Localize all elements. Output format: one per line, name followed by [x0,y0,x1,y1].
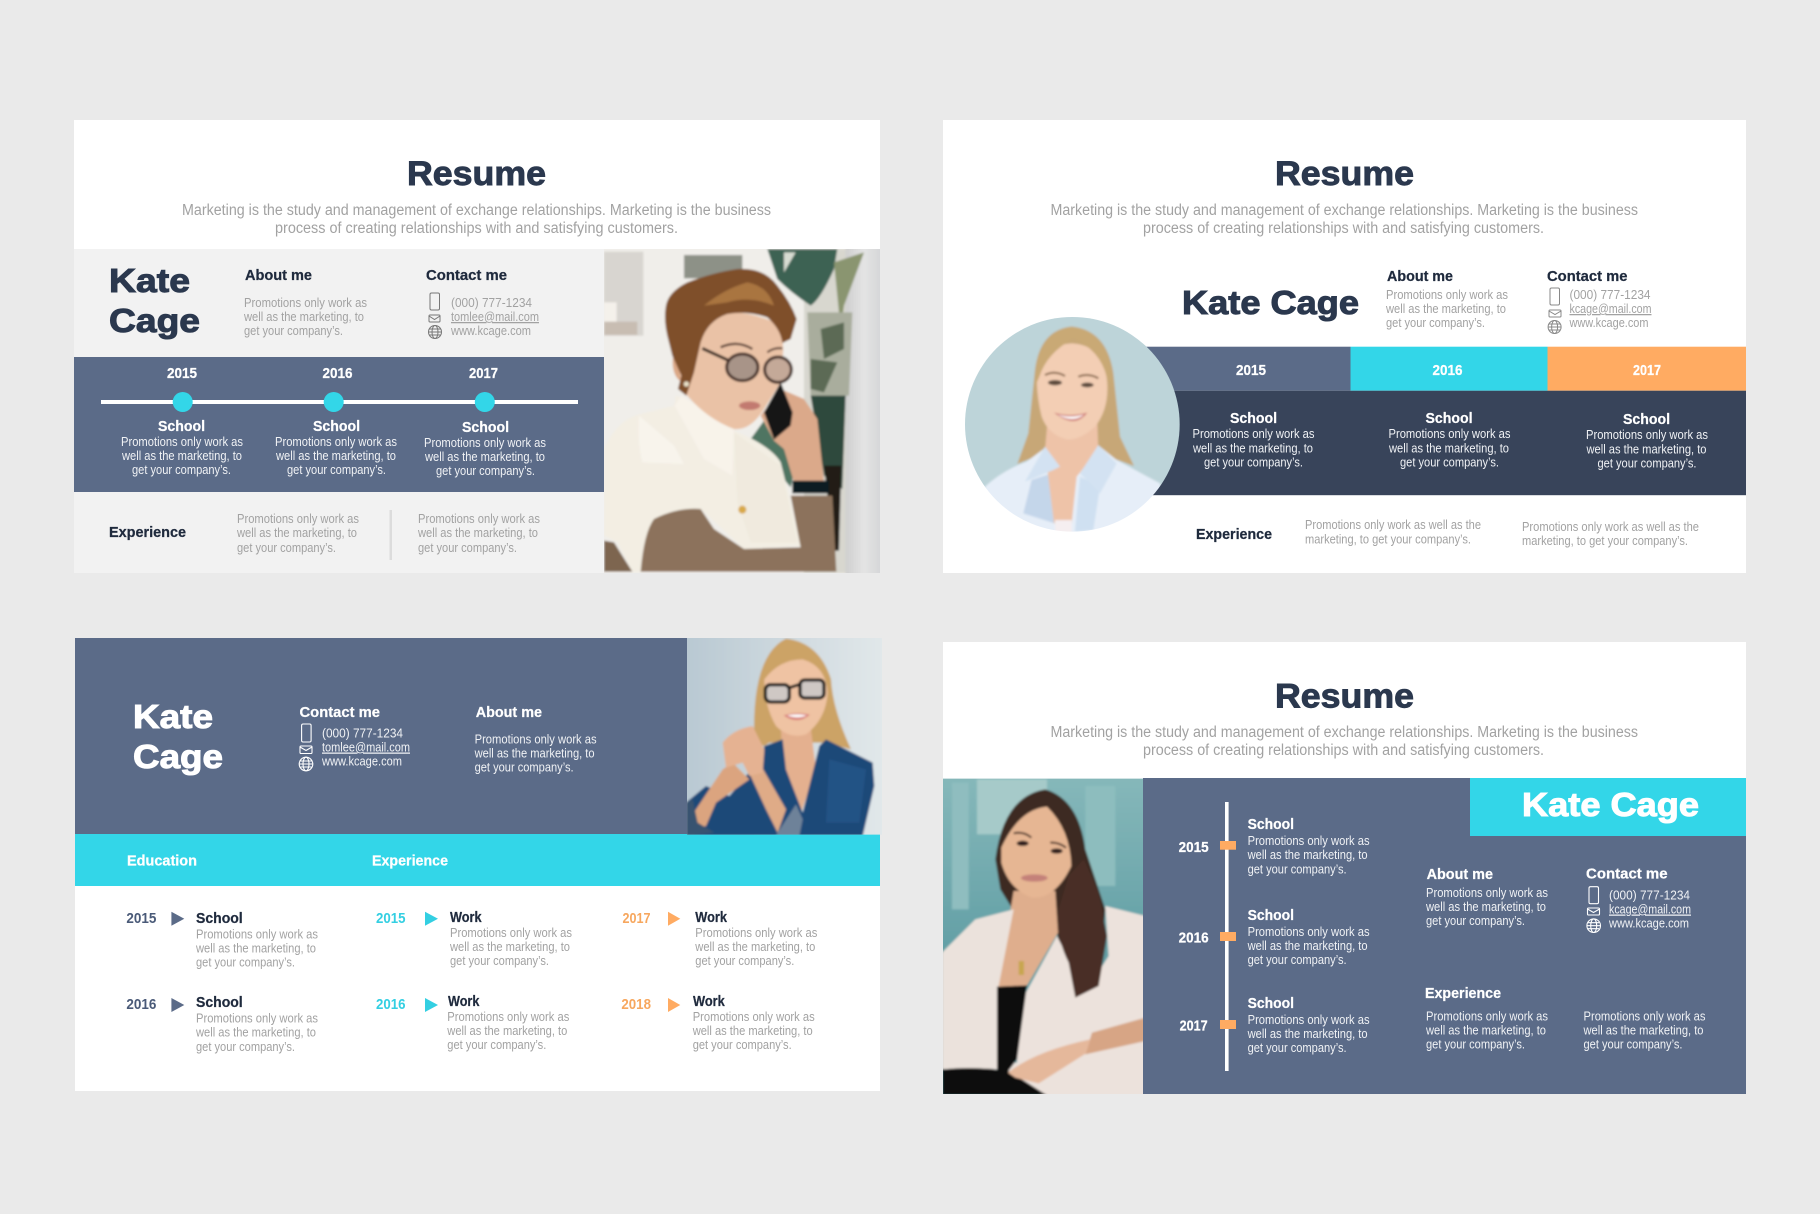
title: Resume [1275,678,1414,716]
subtitle [1050,724,1638,759]
subtitle: Marketing is the study and management of exchange relationships. Marketing is the business [1050,724,1638,741]
contact me [299,705,410,771]
photo: woman with glasses [683,633,886,839]
experience: well as the marketing, to [417,526,538,540]
timeline: education: well as the marketing, to [1247,848,1368,862]
year tabs: School [1230,411,1277,427]
experience: well as the marketing, to [236,526,357,540]
education list: well as the marketing, to [195,942,316,956]
contact me: Contact me [1547,269,1628,285]
year tabs: Promotions only work as [1586,428,1708,442]
timeline: education: 2016 [322,366,352,382]
timeline: education: well as the marketing, to [121,449,242,463]
contact me: www.kcage.com [321,754,402,768]
experience: Promotions only work as [1426,1010,1548,1024]
education list: Promotions only work as [196,928,318,942]
experience: get your company’s. [1584,1038,1682,1052]
education list: get your company’s. [196,1040,295,1054]
experience list: cyan: Promotions only work as [447,1010,569,1024]
experience: Promotions only work as [1584,1010,1706,1024]
contact me: (000) 777-1234 [1570,288,1650,302]
year tabs: Promotions only work as [1192,427,1314,441]
experience: well as the marketing, to [1583,1024,1704,1038]
about me: get your company’s. [1426,914,1525,928]
experience list: orange: 2017 [622,911,650,927]
contact me: (000) 777-1234 [322,726,403,740]
education list: well as the marketing, to [195,1026,316,1040]
about me [1385,269,1508,330]
experience: Promotions only work as well as the [1305,518,1481,532]
about me: About me [245,268,312,284]
subtitle [182,202,771,237]
name: Kate Cage [1182,284,1359,321]
contact me: kcage@mail.com [1609,902,1691,916]
section heading: experience: Experience [372,854,448,870]
contact me: Contact me [300,705,380,721]
timeline: education: School [313,419,360,435]
experience list: cyan: get your company’s. [447,1038,546,1052]
title: Resume [1275,155,1414,193]
about me: well as the marketing, to [1385,302,1506,316]
year tabs: get your company’s. [1598,456,1696,470]
about me: well as the marketing, to [1425,900,1546,914]
experience: marketing, to get your company’s. [1522,534,1688,548]
about me [243,268,367,338]
year tabs: School [1623,412,1670,428]
experience list: cyan: 2015 [376,911,406,927]
experience list: orange: well as the marketing, to [694,940,815,954]
photo: woman on phone [601,246,884,576]
experience list: orange: get your company’s. [695,954,794,968]
contact me: Contact me [426,268,507,284]
timeline: education: 2015 [1179,840,1209,856]
education list: Promotions only work as [196,1012,318,1026]
experience list: cyan: well as the marketing, to [449,940,570,954]
experience: get your company’s. [1426,1038,1525,1052]
title: Resume [407,155,546,193]
about me: Promotions only work as [475,732,597,746]
panel: resume slide 4 [939,642,1746,1099]
experience [1425,986,1706,1052]
timeline: education: Promotions only work as [275,435,397,449]
year tabs: well as the marketing, to [1192,442,1313,456]
year tabs: well as the marketing, to [1388,442,1509,456]
contact me [1586,866,1691,932]
about me: get your company’s. [244,324,343,338]
experience list: cyan [376,910,572,1052]
subtitle [1050,202,1638,237]
education list: 2015 [126,911,156,927]
about me: well as the marketing, to [474,746,595,760]
timeline: education: 2017 [1180,1018,1208,1034]
experience: Promotions only work as [237,512,359,526]
name [109,262,200,339]
timeline: education [1179,802,1370,1071]
year tabs: get your company’s. [1400,456,1499,470]
timeline: education: well as the marketing, to [1247,1027,1368,1041]
subtitle: process of creating relationships with and satisfying customers. [1143,220,1544,237]
year tabs [1100,347,1746,495]
experience list: orange: get your company’s. [693,1038,792,1052]
experience: Experience [1425,986,1501,1002]
timeline: education: School [1248,817,1294,833]
experience: get your company’s. [237,541,336,555]
panel: resume slide 2 [943,120,1746,573]
about me: About me [476,705,542,721]
timeline: education: Promotions only work as [121,435,243,449]
subtitle: Marketing is the study and management of exchange relationships. Marketing is the business [1050,202,1638,219]
about me: About me [1427,867,1493,883]
timeline: education: get your company’s. [1248,862,1347,876]
timeline: education: get your company’s. [436,464,535,478]
name: Kate [109,262,190,299]
timeline: education: get your company’s. [132,463,231,477]
timeline: education: Promotions only work as [1248,925,1370,939]
subtitle: process of creating relationships with and satisfying customers. [1143,742,1544,759]
photo: woman with long dark hair [939,776,1149,1099]
panel: resume slide 1 [74,120,884,576]
experience list: orange: Promotions only work as [693,1010,815,1024]
education list: 2016 [126,997,156,1013]
about me: get your company’s. [475,760,574,774]
experience list: orange: Work [693,994,726,1010]
timeline: education: School [1248,996,1294,1012]
experience [1196,518,1699,548]
contact me [426,268,539,338]
about me: Promotions only work as [1386,288,1508,302]
experience list: orange: 2018 [621,997,651,1013]
contact icons [1548,288,1561,334]
experience [109,510,540,560]
name [133,698,223,775]
experience: Promotions only work as [418,512,540,526]
timeline: education: get your company’s. [1248,953,1347,967]
experience list: orange: Promotions only work as [695,926,817,940]
contact icons [299,724,313,771]
experience: Experience [109,525,186,541]
contact me: (000) 777-1234 [1609,888,1690,902]
experience list: cyan: Work [450,910,482,926]
timeline: education: Promotions only work as [1248,834,1370,848]
experience list: cyan: well as the marketing, to [446,1024,567,1038]
timeline: education: well as the marketing, to [424,450,545,464]
contact me: www.kcage.com [1569,316,1648,330]
education list [126,911,318,1054]
timeline: education: get your company’s. [287,463,386,477]
section heading: education: Education [127,854,197,870]
contact me: kcage@mail.com [1570,302,1652,316]
year tabs: well as the marketing, to [1586,442,1706,456]
timeline: education: get your company’s. [1248,1041,1347,1055]
timeline: education: 2017 [469,366,498,382]
year tabs: 2015 [1236,363,1266,379]
experience list: cyan: Work [448,994,480,1010]
experience: get your company’s. [418,541,517,555]
experience list: orange [621,910,817,1052]
timeline: education [101,366,578,478]
year tabs: School [1426,411,1472,427]
experience list: cyan: Promotions only work as [450,926,572,940]
about me: well as the marketing, to [243,310,364,324]
name: Cage [133,738,223,775]
timeline: education: 2016 [1179,930,1209,946]
timeline: education: 2015 [167,366,197,382]
timeline: education: Promotions only work as [424,436,546,450]
timeline: education: well as the marketing, to [275,449,396,463]
panel: resume slide 3 [75,633,886,1091]
experience list: cyan: get your company’s. [450,954,549,968]
contact me: www.kcage.com [450,324,531,338]
timeline: education: School [462,420,509,436]
contact me: www.kcage.com [1608,916,1689,930]
timeline: education: School [158,419,205,435]
contact me: Contact me [1586,866,1668,882]
experience: Experience [1196,527,1272,543]
timeline: education: well as the marketing, to [1247,939,1368,953]
timeline: education: School [1248,908,1294,924]
contact me: tomlee@mail.com [322,740,410,754]
subtitle: process of creating relationships with and satisfying customers. [275,220,678,237]
year tabs: Promotions only work as [1388,427,1510,441]
about me: Promotions only work as [244,296,367,310]
name: Kate [133,698,213,735]
contact me [1547,269,1652,334]
about me: Promotions only work as [1426,886,1548,900]
education list: School [196,995,243,1011]
contact icons [1587,887,1600,932]
education list: get your company’s. [196,956,295,970]
experience: marketing, to get your company’s. [1305,532,1471,546]
experience: Promotions only work as well as the [1522,520,1699,534]
education list: School [196,911,243,927]
contact me: tomlee@mail.com [451,310,539,324]
year tabs: 2016 [1432,363,1462,379]
contact me: (000) 777-1234 [451,296,532,310]
contact icons [428,293,442,338]
experience list: orange: well as the marketing, to [692,1024,813,1038]
experience list: cyan: 2016 [376,997,406,1013]
photo: smiling woman in circle [965,317,1180,532]
experience: well as the marketing, to [1425,1024,1546,1038]
about me [1425,867,1548,928]
timeline: education: Promotions only work as [1248,1013,1370,1027]
year tabs: 2017 [1633,363,1661,379]
name: Cage [109,302,200,339]
subtitle: Marketing is the study and management of exchange relationships. Marketing is the business [182,202,771,219]
about me [474,705,597,774]
about me: About me [1387,269,1453,285]
about me: get your company’s. [1386,316,1485,330]
year tabs: get your company’s. [1204,456,1303,470]
name: Kate Cage [1522,786,1699,823]
experience list: orange: Work [695,910,728,926]
